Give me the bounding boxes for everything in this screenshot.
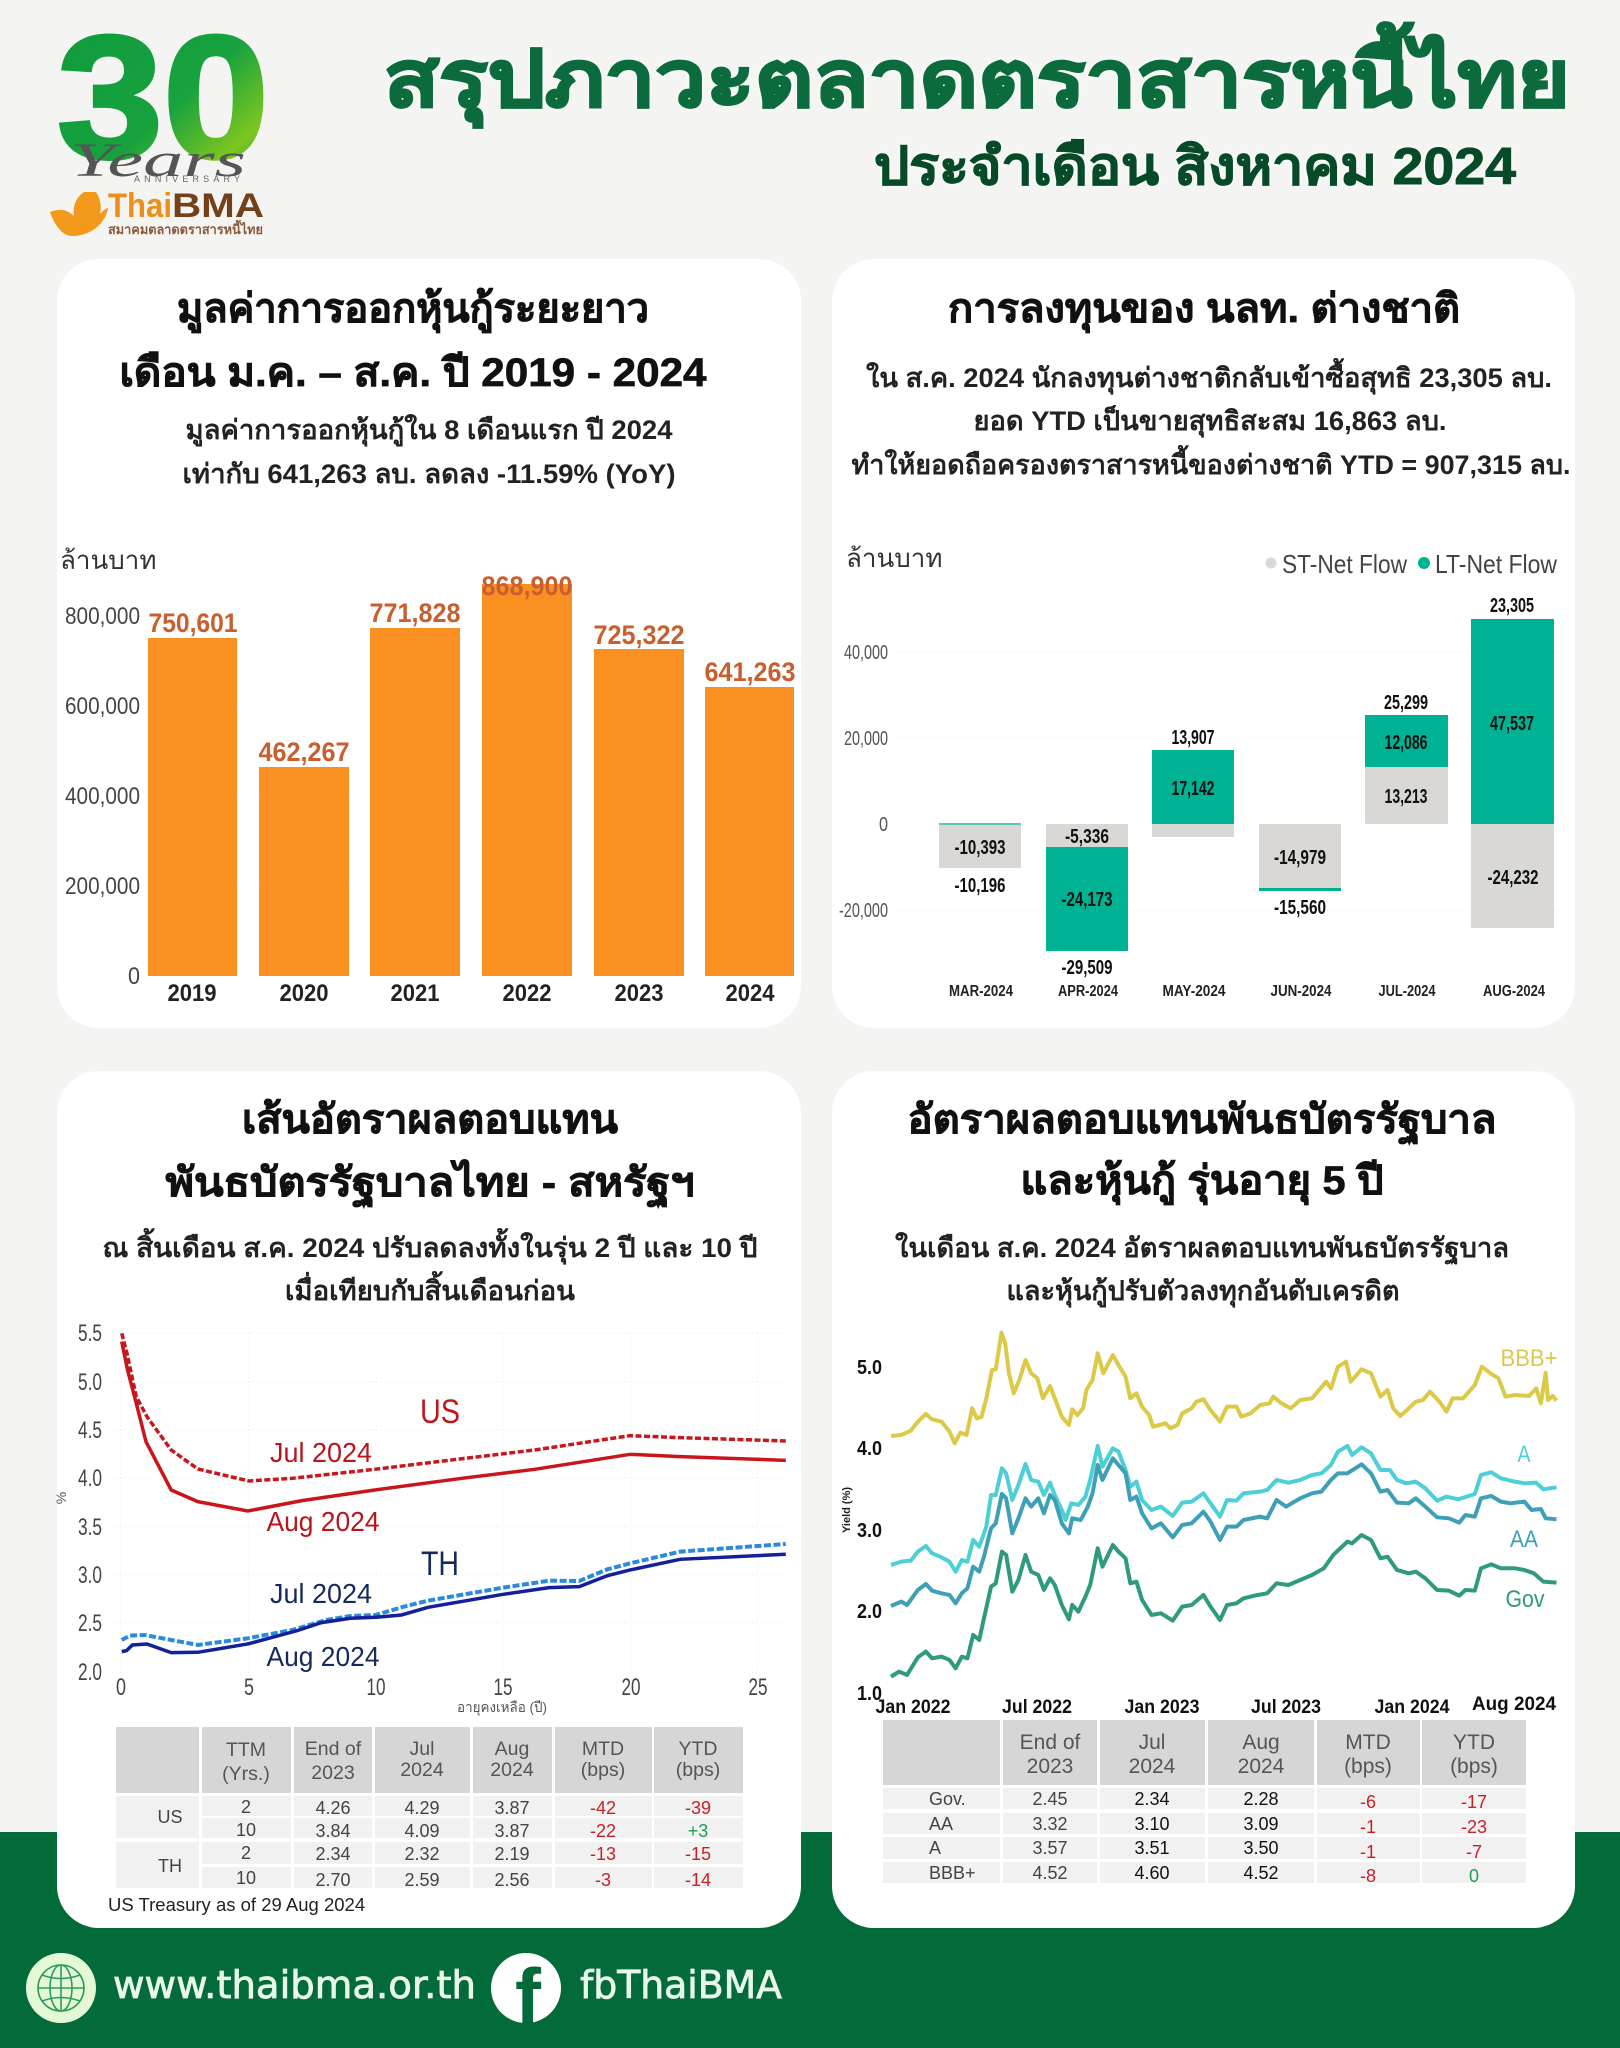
heading: 5y yields: และหุ้นกู้ รุ่นอายุ 5 ปี <box>1020 1159 1384 1206</box>
line chart: credit yields: Jan 2023 <box>1124 1697 1200 1718</box>
stacked bar chart: flows: 13,213 <box>1384 786 1428 808</box>
stacked bar chart: flows: -15,560 <box>1274 897 1326 919</box>
heading: issuance: มูลค่าการออกหุ้นกู้ระยะยาว <box>177 287 649 334</box>
table: corporate yields: 4.52 <box>1032 1863 1068 1883</box>
table: corporate yields: AA <box>929 1814 953 1834</box>
line chart: credit yields: 3.0 <box>857 1520 882 1542</box>
line chart: yield curves: 5.5 <box>78 1320 102 1347</box>
stacked bar chart: flows: 0 <box>879 814 888 836</box>
table: government bond yields: 2024 <box>490 1759 534 1781</box>
panel: foreign investors <box>832 259 1575 1028</box>
table: government bond yields: (Yrs.) <box>222 1763 270 1785</box>
legend <box>1266 549 1557 579</box>
line chart: yield curves: 4.0 <box>78 1465 102 1492</box>
line chart: credit yields: 4.0 <box>857 1438 882 1460</box>
line chart: credit yields: Aug 2024 <box>1472 1694 1556 1715</box>
footer: website <box>26 1953 476 2023</box>
logo: ThaiBMA 30 years: ANNIVERSARY <box>134 174 240 184</box>
bar chart: issuance: 800,000 <box>65 603 140 630</box>
line chart: yield curves: % <box>53 1492 69 1504</box>
bar chart: issuance: 725,322 <box>594 620 684 650</box>
text: issuance summary: มูลค่าการออกหุ้นกู้ใน 8 เดือนแรก ปี 2024 <box>186 414 672 447</box>
bar chart: issuance: 2019 <box>168 980 216 1007</box>
table: corporate yields: A <box>929 1838 941 1858</box>
bar chart: issuance <box>65 571 796 1007</box>
panel: bond issuance <box>57 259 801 1028</box>
line chart: yield curves: 3.0 <box>78 1562 102 1589</box>
table: government bond yields: 3.87 <box>494 1821 530 1841</box>
table: corporate yields: 4.52 <box>1243 1863 1279 1883</box>
footer band <box>0 1832 1620 2048</box>
table: government bond yields: 2 <box>241 1843 251 1863</box>
unit label: ล้านบาท <box>60 545 157 575</box>
table: corporate yields: End of <box>1020 1731 1081 1754</box>
bar chart: issuance: 200,000 <box>65 873 140 900</box>
bar chart: issuance: 868,900 <box>482 571 572 601</box>
bar chart: issuance: 2023 <box>614 980 664 1007</box>
table: government bond yields: End of <box>305 1738 362 1760</box>
legend: ST-Net Flow <box>1282 549 1407 579</box>
table: corporate yields: 2024 <box>1129 1755 1176 1778</box>
stacked bar chart: flows: JUL-2024 <box>1378 983 1436 1000</box>
table: government bond yields: 10 <box>236 1820 256 1840</box>
bar chart: issuance: 2020 <box>280 980 328 1007</box>
line chart: credit yields: Jul 2022 <box>1002 1697 1072 1718</box>
stacked bar chart: flows: APR-2024 <box>1058 983 1118 1000</box>
stacked bar chart: flows: 23,305 <box>1490 595 1534 617</box>
line chart: yield curves: Jul 2024 <box>270 1437 372 1468</box>
bar chart: issuance: 600,000 <box>65 693 140 720</box>
table: corporate yields: (bps) <box>1450 1755 1498 1778</box>
stacked bar chart: flows: AUG-2024 <box>1483 983 1545 1000</box>
heading: yield curve: พันธบัตรรัฐบาลไทย - สหรัฐฯ <box>166 1159 694 1209</box>
table: corporate yields: 3.50 <box>1243 1838 1279 1858</box>
table: government bond yields: TTM <box>226 1739 266 1761</box>
line chart: yield curves: 0 <box>116 1674 126 1701</box>
footer: facebook <box>491 1952 782 2040</box>
line chart: yield curves: Aug 2024 <box>266 1641 380 1672</box>
stacked bar chart: flows: JUN-2024 <box>1270 983 1332 1000</box>
table: government bond yields: 2.19 <box>494 1844 530 1864</box>
footer: website: www.thaibma.or.th <box>113 1963 476 2007</box>
text: foreign summary: ใน ส.ค. 2024 นักลงทุนต่างชาติกลับเข้าซื้อสุทธิ 23,305 ลบ. <box>866 357 1552 395</box>
table: corporate yields: 2024 <box>1238 1755 1285 1778</box>
line chart: yield curves: 15 <box>494 1674 512 1701</box>
table: corporate yields: 3.51 <box>1134 1838 1170 1858</box>
stacked bar chart: flows: -29,509 <box>1062 957 1112 979</box>
text: foreign summary <box>852 357 1570 480</box>
stacked bar chart: flows: 17,142 <box>1172 778 1214 800</box>
line chart: yield curves <box>53 1320 786 1716</box>
table: government bond yields: (bps) <box>581 1759 625 1781</box>
line chart: yield curves: TH <box>421 1545 459 1583</box>
logo: ThaiBMA 30 years: Thai <box>108 187 172 225</box>
stacked bar chart: flows: 47,537 <box>1490 713 1534 735</box>
logo: ThaiBMA 30 years: BMA <box>172 187 264 225</box>
unit label: ล้านบาท <box>846 543 943 573</box>
heading: yield curve <box>166 1098 694 1209</box>
table: government bond yields: US <box>157 1807 183 1827</box>
heading: foreign investment: การลงทุนของ นลท. ต่างชาติ <box>948 287 1460 334</box>
text: issuance summary: เท่ากับ 641,263 ลบ. ลดลง -11.59% (YoY) <box>182 459 676 489</box>
table: government bond yields: Aug <box>495 1738 529 1760</box>
line chart: yield curves: 10 <box>366 1674 386 1701</box>
table: government bond yields: 2.56 <box>494 1870 530 1890</box>
table: corporate yields <box>883 1720 1526 1886</box>
icon: globe <box>26 1953 96 2023</box>
table: corporate yields: BBB+ <box>929 1863 976 1883</box>
line chart: credit yields: Yield (%) <box>841 1487 853 1533</box>
bar chart: issuance: 0 <box>128 963 140 990</box>
icon: facebook: f <box>515 1952 542 2040</box>
table: corporate yields: 2023 <box>1027 1755 1073 1778</box>
table: government bond yields: +3 <box>688 1821 708 1841</box>
table: government bond yields: MTD <box>582 1738 624 1760</box>
heading: yield curve: เส้นอัตราผลตอบแทน <box>242 1098 618 1142</box>
logo: ThaiBMA 30 years: 30 <box>57 0 269 194</box>
table: government bond yields: 10 <box>236 1868 256 1888</box>
bar chart: issuance: 2021 <box>390 980 440 1007</box>
table: corporate yields: -1 <box>1360 1817 1376 1837</box>
table: government bond yields: -39 <box>685 1798 711 1818</box>
stacked bar chart: flows: -14,979 <box>1274 847 1326 869</box>
table: corporate yields: 0 <box>1469 1866 1479 1886</box>
table: corporate yields: 2.28 <box>1243 1789 1279 1809</box>
line chart: credit yields: AA <box>1510 1526 1538 1553</box>
table: government bond yields: 3.87 <box>494 1798 530 1818</box>
bar chart: issuance: 750,601 <box>148 608 238 638</box>
subtitle: ประจำเดือน สิงหาคม 2024 <box>874 138 1516 196</box>
note: US Treasury date: US Treasury as of 29 Aug 2024 <box>108 1894 365 1915</box>
table: corporate yields: Jul <box>1139 1731 1165 1754</box>
table: government bond yields: 2024 <box>400 1759 444 1781</box>
table: government bond yields: YTD <box>678 1738 718 1760</box>
stacked bar chart: flows: -5,336 <box>1065 826 1109 848</box>
title: สรุปภาวะตลาดตราสารหนี้ไทย <box>384 22 1570 128</box>
line chart: yield curves: 5 <box>244 1674 254 1701</box>
text: yield curve summary: ณ สิ้นเดือน ส.ค. 2024 ปรับลดลงทั้งในรุ่น 2 ปี และ 10 ปี <box>102 1227 758 1265</box>
table: corporate yields: 3.57 <box>1032 1838 1068 1858</box>
table: corporate yields: -23 <box>1461 1817 1487 1837</box>
panel: 5y government and corporate yields <box>832 1071 1575 1928</box>
footer: facebook: fbThaiBMA <box>580 1963 782 2007</box>
text: foreign summary: ทำให้ยอดถือครองตราสารหนี้ของต่างชาติ YTD = 907,315 ลบ. <box>852 444 1570 480</box>
heading: issuance: เดือน ม.ค. – ส.ค. ปี 2019 - 2024 <box>120 351 707 395</box>
table: government bond yields: 4.26 <box>315 1798 351 1818</box>
bar chart: issuance: 2024 <box>726 980 775 1007</box>
line chart: credit yields: Jan 2022 <box>876 1697 950 1718</box>
table: corporate yields: -8 <box>1360 1866 1376 1886</box>
bar chart: issuance: 2022 <box>502 980 552 1007</box>
table: government bond yields: (bps) <box>676 1759 720 1781</box>
table: government bond yields: -3 <box>595 1870 611 1890</box>
table: government bond yields: TH <box>158 1856 182 1876</box>
line chart: credit yields: 1.0 <box>857 1683 882 1705</box>
table: government bond yields: Jul <box>410 1738 434 1760</box>
table: government bond yields: 2.70 <box>315 1870 351 1890</box>
line chart: yield curves: 20 <box>622 1674 640 1701</box>
stacked bar chart: flows: 13,907 <box>1172 727 1214 749</box>
table: corporate yields: 3.10 <box>1134 1814 1170 1834</box>
stacked bar chart: flows: 12,086 <box>1384 732 1428 754</box>
line chart: credit yields: Jan 2024 <box>1374 1697 1450 1718</box>
table: corporate yields: -6 <box>1360 1792 1376 1812</box>
stacked bar chart: flows: -10,196 <box>954 875 1006 897</box>
table: government bond yields: -13 <box>590 1844 616 1864</box>
logo: ThaiBMA 30 years: สมาคมตลาดตราสารหนี้ไทย <box>108 219 263 237</box>
text: 5y yields summary: ในเดือน ส.ค. 2024 อัตราผลตอบแทนพันธบัตรรัฐบาล <box>895 1232 1509 1266</box>
stacked bar chart: flows: 20,000 <box>844 728 888 750</box>
line chart: yield curves: Aug 2024 <box>266 1506 380 1537</box>
table: government bond yields <box>116 1727 743 1890</box>
stacked bar chart: flows: -10,393 <box>954 837 1006 859</box>
text: foreign summary: ยอด YTD เป็นขายสุทธิสะสม 16,863 ลบ. <box>974 403 1446 438</box>
bar chart: issuance: 641,263 <box>704 657 796 687</box>
table: corporate yields: -7 <box>1466 1842 1482 1862</box>
table: corporate yields: -1 <box>1360 1842 1376 1862</box>
line chart: yield curves: 3.5 <box>78 1514 102 1541</box>
bar chart: issuance: 462,267 <box>258 737 350 767</box>
table: government bond yields: 2023 <box>311 1762 355 1784</box>
table: government bond yields: -22 <box>590 1821 616 1841</box>
stacked bar chart: flows: -24,173 <box>1062 889 1112 911</box>
table: corporate yields: MTD <box>1345 1731 1391 1754</box>
table: government bond yields: -42 <box>590 1798 616 1818</box>
line chart: credit yields: Jul 2023 <box>1251 1697 1321 1718</box>
table: corporate yields: YTD <box>1453 1731 1495 1754</box>
line chart: yield curves: 2.0 <box>78 1659 102 1686</box>
table: government bond yields: 4.29 <box>404 1798 440 1818</box>
line chart: yield curves: 4.5 <box>78 1417 102 1444</box>
icon: facebook <box>491 1952 561 2040</box>
stacked bar chart: flows: MAR-2024 <box>949 983 1013 1000</box>
table: government bond yields: 2.34 <box>315 1844 351 1864</box>
table: corporate yields: 3.32 <box>1032 1814 1068 1834</box>
legend: LT-Net Flow <box>1435 549 1557 579</box>
table: government bond yields: 2.32 <box>404 1844 440 1864</box>
stacked bar chart: flows: -20,000 <box>839 900 888 922</box>
table: corporate yields: Aug <box>1242 1731 1280 1754</box>
line chart: yield curves: 2.5 <box>78 1610 102 1637</box>
stacked bar chart: flows: -24,232 <box>1488 867 1538 889</box>
table: government bond yields: 2.59 <box>404 1870 440 1890</box>
line chart: yield curves: 25 <box>748 1674 768 1701</box>
panel: yield curve <box>53 1071 801 1928</box>
line chart: yield curves: Jul 2024 <box>270 1578 372 1609</box>
bar chart: issuance: 400,000 <box>65 783 140 810</box>
stacked bar chart: flows: MAY-2024 <box>1162 983 1226 1000</box>
line chart: credit yields: BBB+ <box>1500 1345 1558 1372</box>
heading: 5y yields <box>908 1098 1496 1206</box>
line chart: credit yields: A <box>1518 1441 1530 1468</box>
table: government bond yields: -15 <box>685 1844 711 1864</box>
line chart: credit yields: 2.0 <box>857 1601 882 1623</box>
heading: 5y yields: อัตราผลตอบแทนพันธบัตรรัฐบาล <box>908 1098 1496 1146</box>
bar chart: issuance: 771,828 <box>370 598 460 628</box>
text: yield curve summary: เมื่อเทียบกับสิ้นเดือนก่อน <box>285 1270 576 1306</box>
table: corporate yields: (bps) <box>1344 1755 1392 1778</box>
logo: ThaiBMA 30 years: Years <box>70 134 246 187</box>
table: government bond yields: 3.84 <box>315 1821 351 1841</box>
line chart: yield curves: US <box>420 1393 460 1431</box>
text: issuance summary <box>182 414 676 489</box>
table: corporate yields: 2.34 <box>1134 1789 1170 1809</box>
line chart: credit yields: Gov <box>1506 1586 1544 1613</box>
table: government bond yields: 2 <box>241 1797 251 1817</box>
table: corporate yields: -17 <box>1461 1792 1487 1812</box>
text: 5y yields summary: และหุ้นกู้ปรับตัวลงทุกอันดับเครดิต <box>1006 1276 1400 1308</box>
text: yield curve summary <box>102 1227 758 1306</box>
line chart: credit yields <box>841 1333 1558 1718</box>
line chart: credit yields: 5.0 <box>857 1357 882 1379</box>
stacked bar chart: flows: 40,000 <box>844 642 888 664</box>
table: government bond yields: -14 <box>685 1870 711 1890</box>
table: corporate yields: 2.45 <box>1032 1789 1068 1809</box>
table: corporate yields: Gov. <box>929 1789 966 1809</box>
table: corporate yields: 4.60 <box>1134 1863 1170 1883</box>
table: government bond yields: 4.09 <box>404 1821 440 1841</box>
heading: issuance <box>120 287 707 395</box>
line chart: yield curves: 5.0 <box>78 1369 102 1396</box>
stacked bar chart: flows: 25,299 <box>1384 692 1428 714</box>
text: 5y yields summary <box>895 1232 1509 1308</box>
stacked bar chart: flows <box>839 595 1560 1000</box>
line chart: yield curves: อายุคงเหลือ (ปี) <box>457 1699 547 1716</box>
table: corporate yields: 3.09 <box>1243 1814 1279 1834</box>
